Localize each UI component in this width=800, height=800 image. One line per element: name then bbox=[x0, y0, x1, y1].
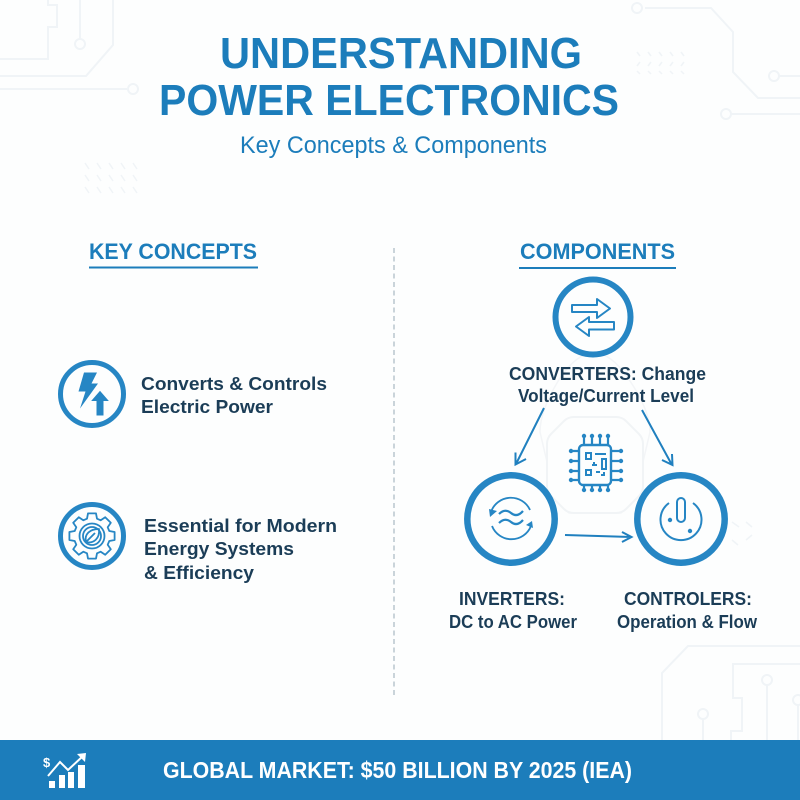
subtitle: Key Concepts & Components bbox=[240, 132, 547, 159]
text: essential for modern energy systems bbox=[144, 516, 337, 583]
text: converters: CONVERTERS: Change bbox=[509, 364, 706, 384]
icon: market growth chart: $ bbox=[43, 755, 51, 770]
center chip hub bbox=[540, 353, 650, 513]
icon: controllers bbox=[637, 475, 725, 563]
text: inverters: INVERTERS: bbox=[459, 589, 565, 609]
text: inverters bbox=[449, 589, 577, 632]
icon: market growth chart bbox=[43, 753, 86, 788]
footer banner bbox=[0, 740, 800, 800]
text: essential for modern energy systems: & Efficiency bbox=[144, 563, 254, 583]
title: POWER ELECTRONICS bbox=[159, 76, 619, 125]
text: controllers: CONTROLERS: bbox=[624, 589, 752, 609]
text: essential for modern energy systems: Essential for Modern bbox=[144, 516, 337, 536]
heading: components: COMPONENTS bbox=[520, 239, 675, 264]
icon: converters bbox=[556, 280, 630, 354]
text: inverters: DC to AC Power bbox=[449, 612, 577, 632]
title: UNDERSTANDING bbox=[220, 29, 582, 78]
text: converters: Voltage/Current Level bbox=[518, 386, 694, 406]
panel: components bbox=[449, 239, 758, 632]
arrow: converters to controllers bbox=[642, 410, 672, 465]
heading: key concepts: KEY CONCEPTS bbox=[89, 239, 257, 264]
arrow: converters to inverters bbox=[516, 408, 544, 464]
market statistic: GLOBAL MARKET: $50 BILLION BY 2025 (IEA) bbox=[163, 757, 632, 783]
title bbox=[159, 29, 619, 125]
divider bbox=[393, 248, 395, 695]
text: converts and controls: Converts & Controls bbox=[141, 374, 327, 394]
text: converts and controls bbox=[141, 374, 327, 417]
text: essential for modern energy systems: Energy Systems bbox=[144, 539, 294, 559]
icon: lightning bolt and up arrow bbox=[60, 362, 124, 426]
arrow: inverters to controllers bbox=[565, 532, 632, 542]
icon: inverters bbox=[467, 475, 555, 563]
icon: gear with leaf bbox=[60, 504, 124, 568]
text: converts and controls: Electric Power bbox=[141, 397, 273, 417]
text: converters bbox=[509, 364, 706, 406]
text: controllers: Operation & Flow bbox=[617, 612, 758, 632]
panel: key concepts bbox=[60, 239, 337, 583]
icon: microchip bbox=[569, 434, 623, 492]
text: controllers bbox=[617, 589, 758, 632]
